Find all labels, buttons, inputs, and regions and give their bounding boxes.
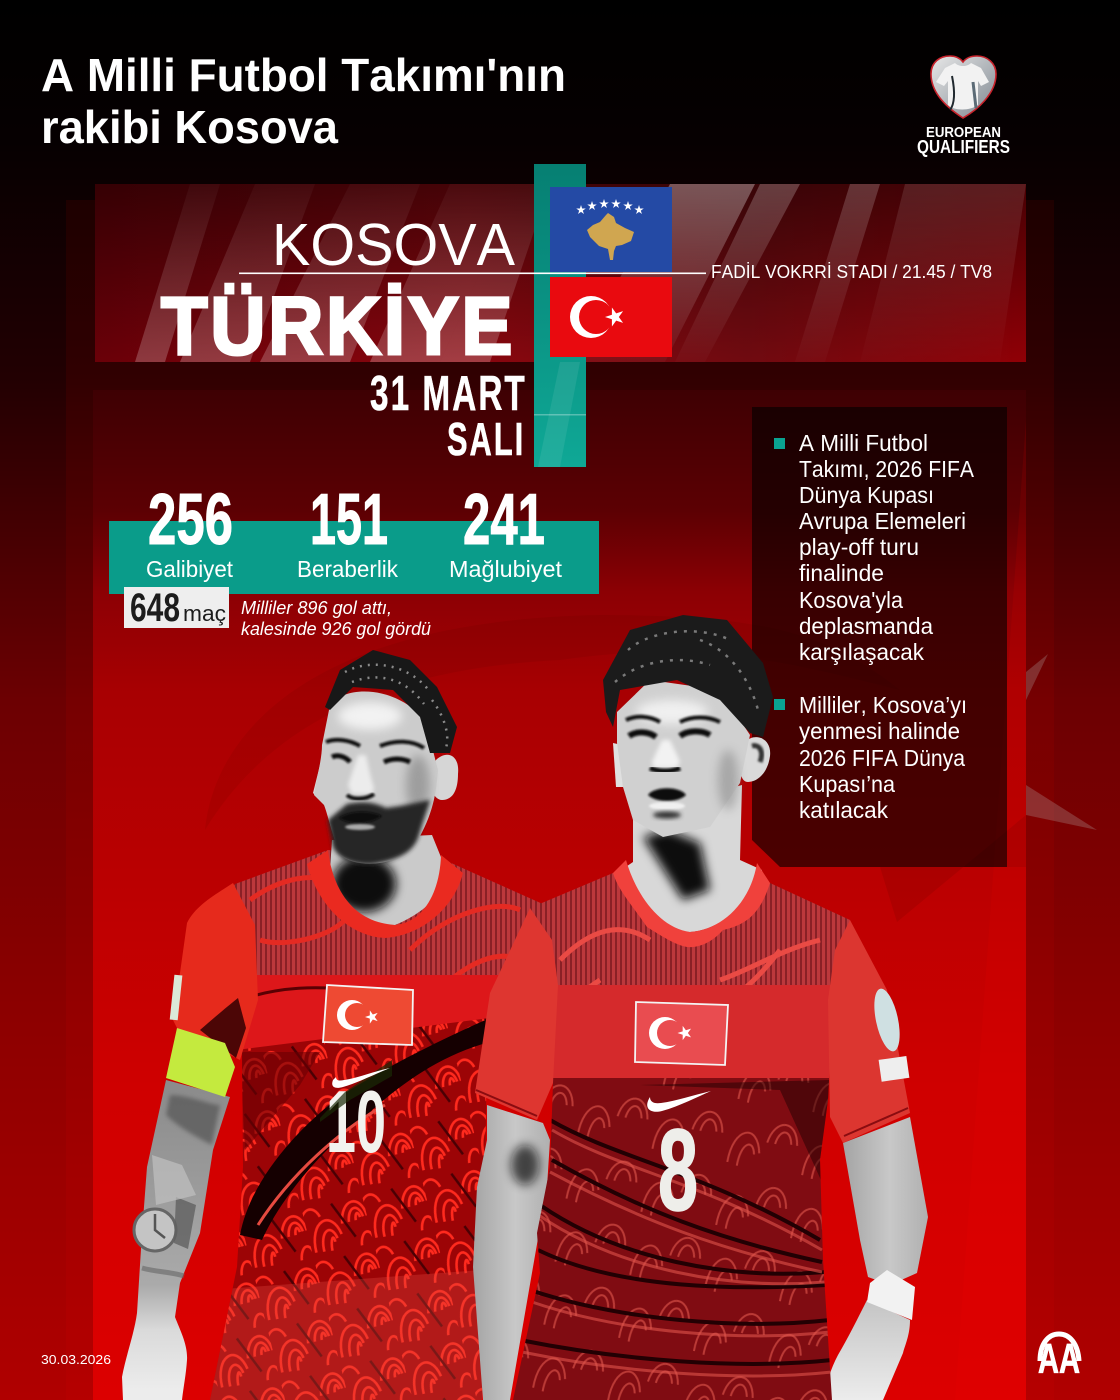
- number shadow band: [320, 1060, 392, 1122]
- jersey flag: [323, 985, 413, 1045]
- wristband: [867, 1270, 915, 1320]
- logo: European Qualifiers: EUROPEAN: [926, 125, 1001, 141]
- bullet one: play-off turu: [799, 534, 919, 560]
- date: [370, 366, 527, 466]
- bullet one: [774, 430, 975, 665]
- team names: KOSOVA: [272, 212, 516, 278]
- forehead highlight: [338, 702, 402, 730]
- stat: losses: Mağlubiyet: [449, 556, 563, 582]
- total matches badge: 648: [130, 586, 180, 630]
- forearm with tattoos: [122, 1080, 230, 1400]
- flag: Kosovo: [550, 187, 672, 272]
- bullet one: deplasmanda: [799, 613, 933, 639]
- bullet one: karşılaşacak: [799, 639, 924, 665]
- panel: info box: [752, 407, 1007, 867]
- head: [313, 650, 458, 864]
- arm: right side with hand: [823, 1117, 928, 1400]
- goals note: [241, 598, 431, 639]
- player: right, number 8: [473, 615, 928, 1400]
- collar: [613, 860, 770, 947]
- date: SALI: [447, 415, 525, 466]
- bullet one: finalinde: [799, 560, 884, 586]
- hair: [603, 615, 773, 737]
- bullet two: 2026 FIFA Dünya: [799, 745, 965, 771]
- title: A Milli Futbol Takımı'nın: [41, 49, 566, 101]
- face: [314, 691, 438, 864]
- mouth: [648, 788, 686, 801]
- jersey flag: [635, 1002, 728, 1065]
- neck: [614, 785, 762, 932]
- player: left, number 10: [122, 650, 550, 1400]
- far ear: [313, 765, 325, 805]
- logo: European Qualifiers: [917, 56, 1010, 157]
- eyes and brows: [626, 717, 720, 737]
- bullet two: Milliler, Kosova’yı: [799, 692, 967, 718]
- nose: [652, 740, 680, 768]
- bullet two: [774, 692, 967, 823]
- mouth: [339, 812, 382, 823]
- title: [41, 49, 566, 153]
- total matches badge: [124, 586, 229, 630]
- stat: wins: 256: [148, 480, 233, 560]
- stat: wins: [146, 480, 234, 582]
- divider line and venue: FADİL VOKRRİ STADI / 21.45 / TV8: [711, 261, 992, 282]
- bullet one: A Milli Futbol: [799, 430, 928, 456]
- goals note: Milliler 896 gol attı,: [241, 598, 392, 618]
- bullet two: katılacak: [799, 797, 888, 823]
- nose: [348, 755, 374, 794]
- jersey number 10: 10: [326, 1072, 386, 1171]
- bullet two: yenmesi halinde: [799, 718, 960, 744]
- jersey body: [210, 850, 542, 1400]
- panel: head-to-head stats: [109, 480, 599, 639]
- sleeve badges: [870, 986, 909, 1082]
- jersey body: [500, 870, 860, 1400]
- bullet one: Kosova'yla: [799, 587, 903, 613]
- team names: [161, 212, 516, 372]
- bullet two: Kupası’na: [799, 771, 895, 797]
- sleeves: [475, 908, 910, 1143]
- stat: draws: Beraberlik: [297, 556, 398, 582]
- icon: AA logo: AA: [1038, 1335, 1080, 1382]
- far ear: [613, 743, 623, 787]
- hair: [325, 650, 457, 753]
- bullet one: Takımı, 2026 FIFA: [799, 456, 975, 482]
- stat: draws: [297, 480, 398, 582]
- collar: [307, 850, 463, 938]
- title: rakibi Kosova: [41, 101, 338, 153]
- goals note: kalesinde 926 gol gördü: [241, 619, 431, 639]
- eyes and brows: [326, 740, 424, 762]
- bullet one: Avrupa Elemeleri: [799, 508, 966, 534]
- stat: draws: 151: [310, 480, 388, 560]
- date stamp: 30.03.2026: [41, 1352, 111, 1367]
- stat: wins: Galibiyet: [146, 556, 234, 582]
- logo: European Qualifiers: QUALIFIERS: [917, 137, 1010, 157]
- icon: AA logo: [1038, 1334, 1080, 1382]
- jersey swoosh: [647, 1091, 711, 1112]
- total matches badge: maç: [183, 601, 226, 626]
- stat: losses: [449, 480, 563, 582]
- arm: left side: [473, 1105, 550, 1400]
- sleeve: [170, 883, 258, 1060]
- jersey number 8: 8: [658, 1105, 698, 1235]
- panel: match band: [95, 184, 1026, 362]
- team names: TÜRKİYE: [161, 279, 515, 372]
- icon: heart with shirt: [931, 56, 996, 118]
- date: 31 MART: [370, 366, 527, 421]
- bullet one: Dünya Kupası: [799, 482, 934, 508]
- near ear: [428, 755, 458, 800]
- captain armband: [166, 1028, 235, 1097]
- stat: losses: 241: [463, 480, 545, 560]
- beard: [328, 800, 430, 864]
- neck: [326, 835, 447, 925]
- near ear: [740, 737, 770, 782]
- flag: Türkiye: [550, 277, 672, 357]
- teal vertical bar: [534, 164, 586, 467]
- face: [617, 680, 750, 837]
- head: [603, 615, 773, 837]
- jersey swoosh: [332, 1068, 390, 1088]
